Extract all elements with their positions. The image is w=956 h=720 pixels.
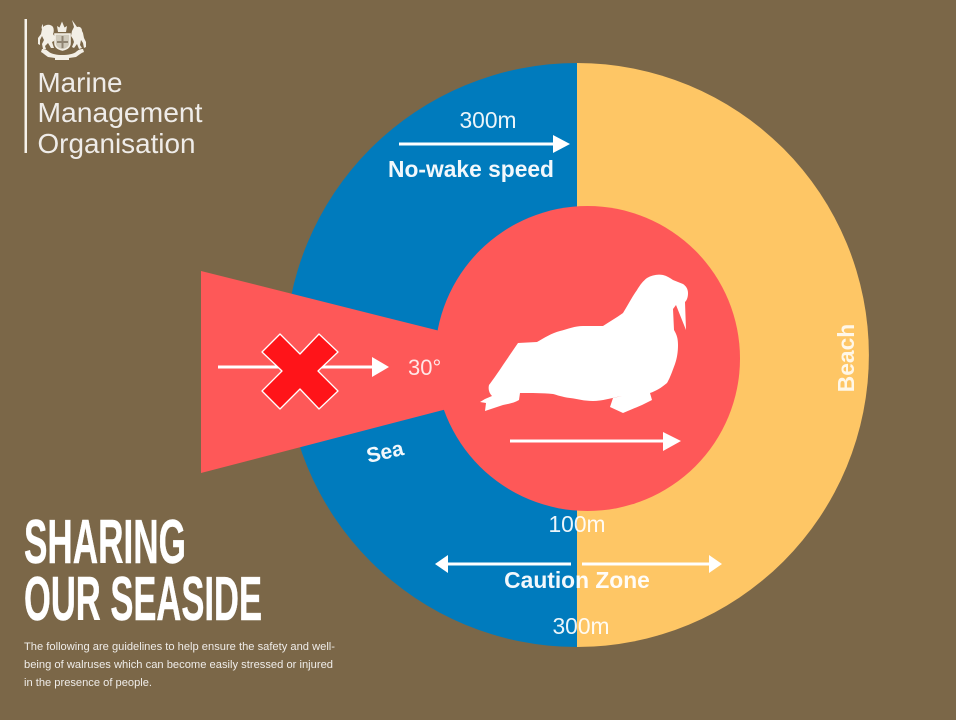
text: organisation name: Management [38, 97, 203, 128]
icon: red cross [262, 334, 338, 409]
text block: introduction: The following are guidelines to help ensure the safety and well- [24, 641, 335, 653]
arrow: no-wake 300m [399, 135, 570, 153]
text block: introduction: in the presence of people. [24, 677, 152, 689]
arrow: caution zone left [435, 555, 571, 573]
label: 100m: 100m [548, 511, 606, 537]
title: sharing our seaside: SHARING [24, 508, 186, 577]
panel: 30 degree exclusion wedge [201, 271, 447, 473]
text: organisation name: Marine [38, 67, 122, 98]
logo: Marine Management Organisation [24, 19, 203, 159]
label: bottom 300m: 300m [552, 613, 610, 639]
label: no-wake speed: No-wake speed [388, 156, 554, 182]
arrow: walrus direction [510, 432, 681, 451]
text block: introduction: being of walruses which can become easily stressed or injured [24, 659, 333, 671]
panel: sea half of outer circle [285, 63, 577, 647]
arrow: caution zone right [582, 555, 722, 573]
text block: introduction [24, 641, 335, 689]
arrow: approach line through wedge [218, 357, 389, 377]
icon: walrus silhouette [480, 275, 688, 413]
title: sharing our seaside: OUR SEASIDE [24, 565, 262, 634]
label: caution zone: Caution Zone [504, 567, 650, 593]
label: beach: Beach [833, 324, 859, 392]
title: sharing our seaside [24, 508, 262, 634]
icon: royal crest [38, 20, 86, 60]
text: organisation name [38, 67, 203, 159]
panel: beach half of outer circle [577, 63, 869, 647]
label: sea: Sea [364, 437, 406, 468]
label: top 300m: 300m [459, 107, 517, 133]
panel: inner 100m circle [435, 206, 740, 511]
label: 30 degrees: 30° [408, 355, 441, 380]
text: organisation name: Organisation [38, 128, 196, 159]
